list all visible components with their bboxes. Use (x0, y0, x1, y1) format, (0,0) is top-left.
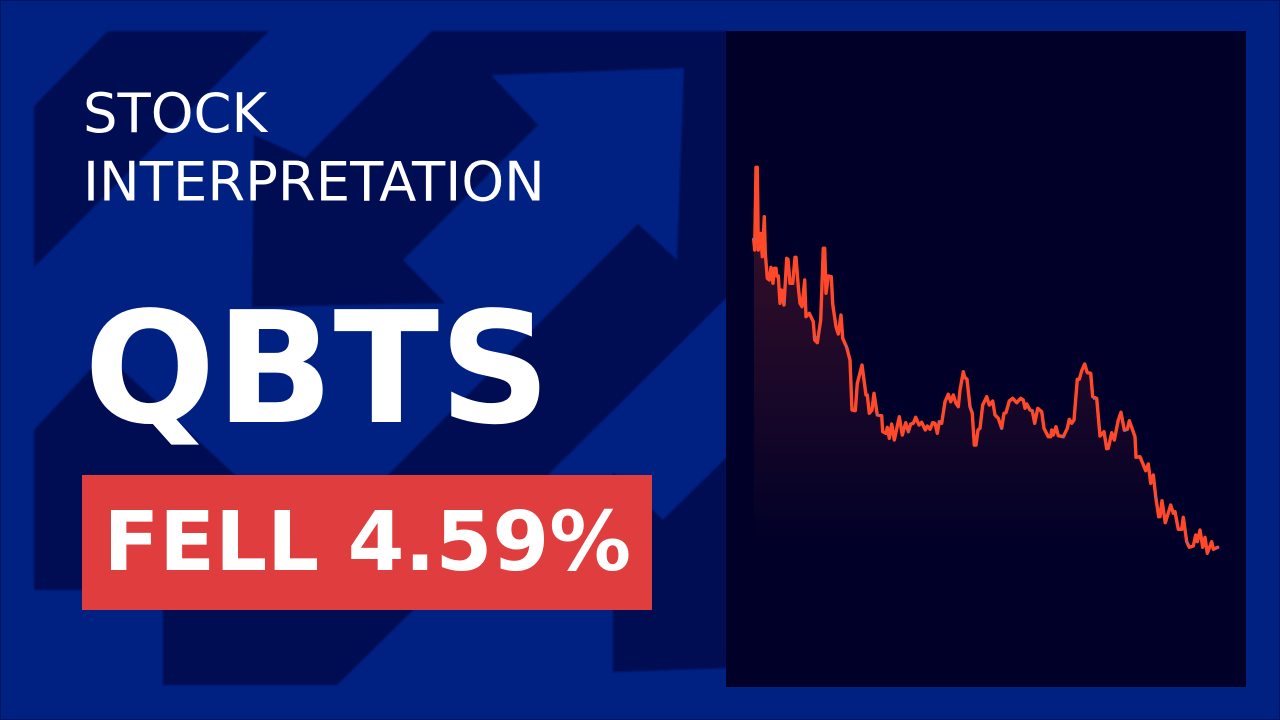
heading: INTERPRETATION (83, 150, 545, 214)
chart panel (726, 31, 1246, 687)
change badge (82, 475, 652, 610)
heading: STOCK (83, 82, 269, 145)
price line (754, 167, 1218, 553)
background arrow pattern (34, 31, 727, 685)
change label: FELL 4.59% (104, 495, 631, 590)
sample point markers (753, 238, 1219, 549)
chart area fill (754, 167, 1218, 560)
ticker: QBTS (84, 278, 551, 459)
